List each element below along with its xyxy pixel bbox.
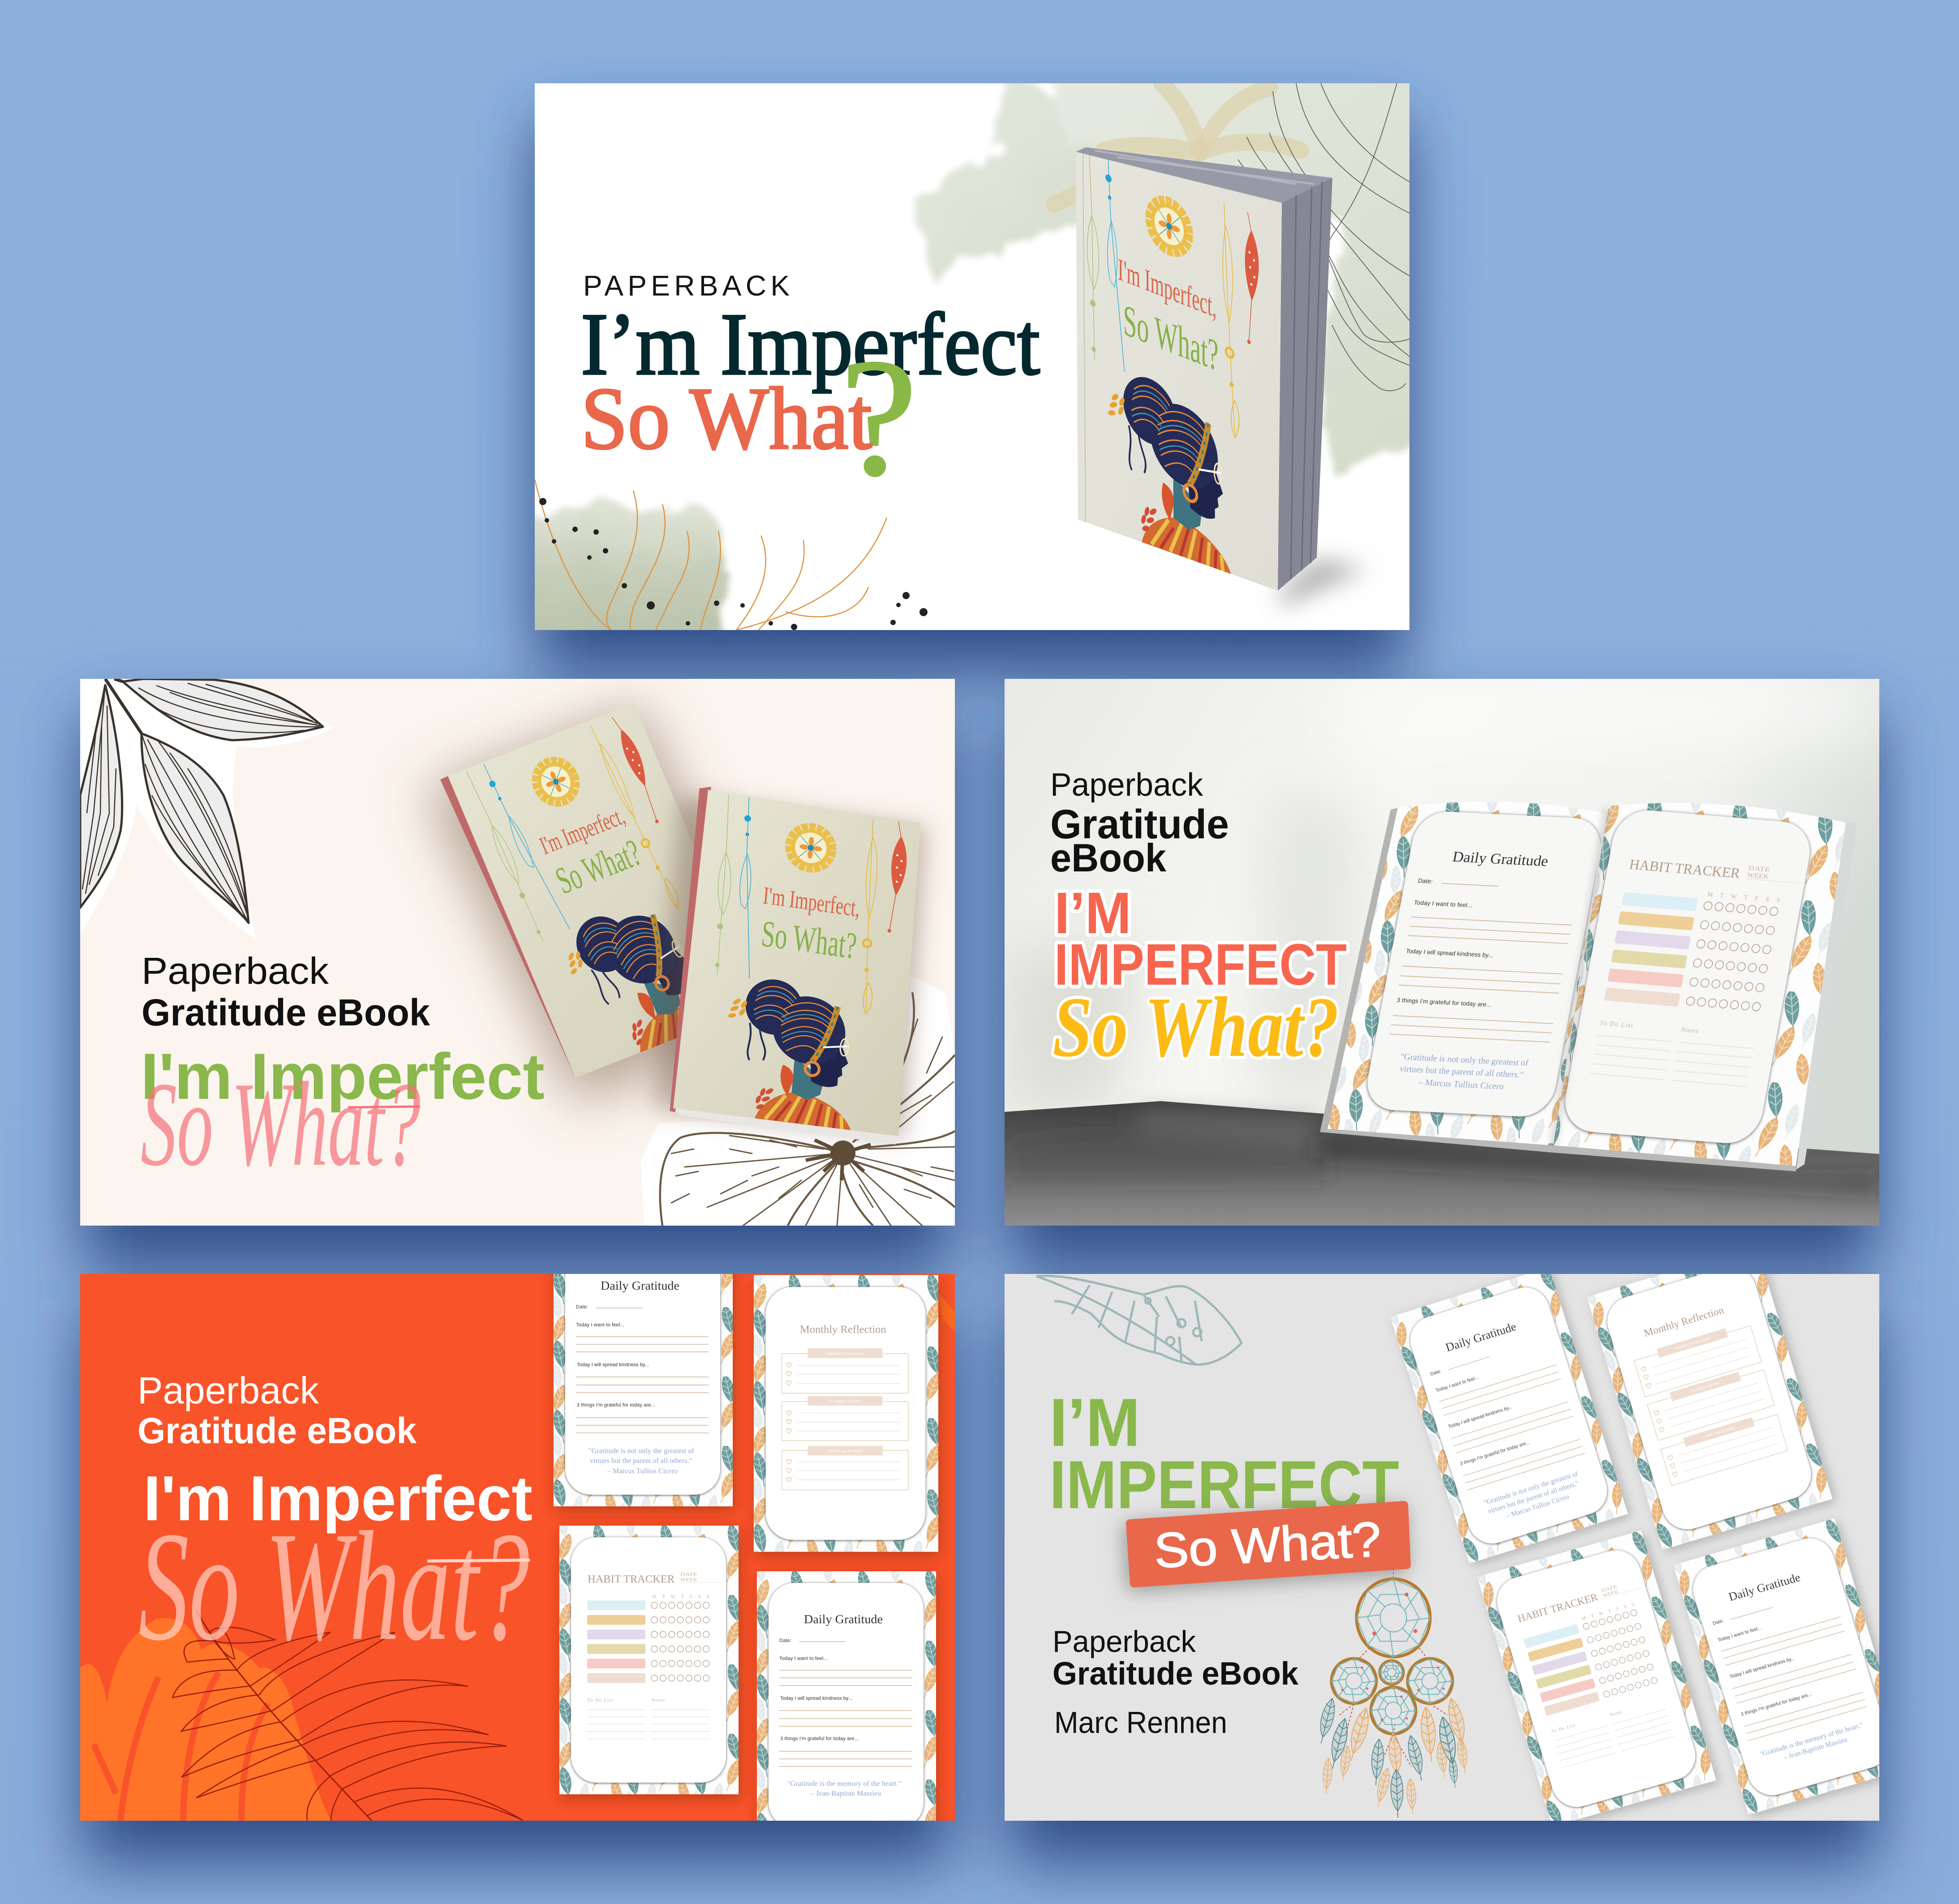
page text: HABIT TRACKER — [1516, 1591, 1599, 1625]
panel: top hero with standing book — [535, 83, 1409, 630]
title: IMPERFECT: IMPERFECT — [1054, 931, 1347, 997]
page text: – Marcus Tullius Cicero — [607, 1467, 678, 1475]
page text: M T W T F S S — [1581, 1602, 1635, 1621]
page text: habit tracker: M T W T F S S — [1706, 891, 1781, 904]
heading: gratitude ebook: Gratitude eBook — [1053, 1656, 1299, 1692]
page text: habit tracker: HABIT TRACKER — [1628, 856, 1741, 881]
book: standing paperback — [1076, 145, 1332, 591]
page: daily gratitude — [554, 1238, 733, 1506]
page text: Today I will spread kindness by... — [1729, 1656, 1796, 1680]
page text — [779, 1612, 901, 1797]
title: I'm Imperfect: I’m Imperfect — [581, 295, 1040, 393]
page text: daily gratitude: – Marcus Tullius Cicero — [1417, 1078, 1504, 1091]
cover title: So What? — [550, 831, 647, 902]
page text: Today I will spread kindness by... — [780, 1696, 852, 1701]
page text: Daily Gratitude — [601, 1279, 679, 1292]
title: I'M: I’M — [1049, 1385, 1140, 1461]
shadow: books — [425, 706, 779, 1104]
page text: 3 things I'm grateful for today are... — [780, 1736, 859, 1741]
page text: daily gratitude: Today I will spread kindness by... — [1405, 948, 1494, 959]
page text: "Gratitude is the memory of the heart." — [787, 1780, 901, 1788]
cover title: So What? — [1123, 295, 1219, 381]
page text: Today I want to feel... — [1717, 1625, 1762, 1643]
page text: Today I will spread kindness by... — [1448, 1405, 1513, 1430]
page text: DATE — [680, 1572, 697, 1577]
page text: habit tracker — [1599, 854, 1786, 1040]
page text — [576, 1279, 695, 1475]
page text: – Jean-Baptiste Massieu — [1783, 1736, 1848, 1762]
page text: Notes — [651, 1698, 665, 1703]
title: So What: So What — [581, 369, 872, 467]
book shadow — [1314, 1136, 1882, 1194]
page text: habit tracker: WEEK — [1746, 871, 1770, 880]
cover title: I'm Imperfect, — [762, 882, 861, 922]
page text: To Do List — [587, 1698, 613, 1703]
page text: I think I can do better — [1702, 1426, 1736, 1439]
page text: "Gratitude is the memory of the heart." — [1759, 1721, 1864, 1758]
left page — [1274, 759, 1695, 1169]
heading: ebook: eBook — [1050, 836, 1167, 880]
page text: 3 things I'm grateful for today are... — [1740, 1692, 1813, 1717]
page text: "Gratitude is not only the greatest of — [1483, 1470, 1579, 1507]
page text: Daily Gratitude — [1727, 1570, 1802, 1604]
cover title: I'm Imperfect, — [536, 801, 629, 860]
orange line plants — [535, 480, 887, 630]
page text: Highlight of the month — [1675, 1336, 1711, 1351]
page text: Date: — [779, 1638, 791, 1643]
title: So What script: So What? — [1053, 979, 1339, 1075]
page text: DATE — [1601, 1584, 1618, 1593]
page: habit tracker — [559, 1526, 739, 1794]
page text — [1705, 1566, 1866, 1770]
title: I'm Imperfect: I'm Imperfect — [141, 1040, 545, 1113]
cover title: So What? — [760, 913, 859, 967]
beige monstera leaf — [1054, 83, 1301, 204]
page text: Daily Gratitude — [1444, 1320, 1518, 1354]
book: angled left — [440, 703, 761, 1078]
cover title — [758, 882, 861, 967]
title: question mark: ? — [840, 325, 917, 510]
page text: Today I will spread kindness by... — [577, 1362, 649, 1368]
page text: – Marcus Tullius Cicero — [1505, 1493, 1570, 1520]
page text: HABIT TRACKER — [588, 1574, 674, 1585]
page text — [1642, 1304, 1757, 1447]
page text: Today I want to feel... — [1435, 1375, 1479, 1394]
heading: gratitude ebook: Gratitude eBook — [142, 991, 430, 1033]
illustration: dreamcatcher — [1315, 1565, 1470, 1818]
callout: So What badge — [1130, 1505, 1407, 1583]
page text: daily gratitude: "Gratitude is not only the greatest of — [1400, 1052, 1529, 1068]
page text: Today I want to feel... — [576, 1322, 624, 1328]
page text: – Jean-Baptiste Massieu — [810, 1790, 881, 1797]
book shadow — [1278, 558, 1368, 607]
page: daily gratitude two — [757, 1571, 936, 1840]
illustration: line leaves — [80, 670, 333, 939]
heading: paperback: Paperback — [142, 950, 329, 992]
page text: daily gratitude — [1380, 847, 1568, 1093]
book: upright right — [672, 790, 921, 1145]
title: I'm Imperfect: I'm Imperfect — [143, 1463, 533, 1534]
title: IMPERFECT: IMPERFECT — [1049, 1447, 1399, 1523]
heading: paperback: Paperback — [1053, 1625, 1196, 1659]
panel: grey with tilted pages and dreamcatcher — [1005, 1246, 1910, 1827]
corner accent — [938, 1292, 955, 1332]
floor shadows — [1005, 1109, 1327, 1185]
monstera shape — [80, 1618, 331, 1821]
page text — [587, 1572, 709, 1703]
heading: paperback: Paperback — [137, 1369, 319, 1411]
author name: Marc Rennen — [1054, 1706, 1227, 1740]
page text: habit tracker: DATE — [1748, 865, 1771, 874]
title: So What script: So What? — [138, 1499, 529, 1673]
page text: Date: — [1430, 1369, 1442, 1377]
illustration: feather — [1036, 1276, 1242, 1364]
page: daily gratitude two — [1673, 1518, 1910, 1815]
page text: Monthly Reflection — [800, 1323, 886, 1335]
title: I'M: I’M — [1054, 880, 1131, 946]
palm frond — [172, 1610, 524, 1821]
page text: "Gratitude is not only the greatest of — [589, 1447, 695, 1455]
wall — [1005, 679, 1879, 1226]
page text: To Do List — [1551, 1723, 1576, 1734]
heading: paperback: Paperback — [1050, 767, 1203, 803]
heading: gratitude ebook: Gratitude eBook — [137, 1411, 417, 1451]
page: daily gratitude — [1390, 1267, 1628, 1564]
page text — [1422, 1316, 1585, 1529]
page text: Notes — [1609, 1710, 1623, 1718]
monstera slits — [94, 1672, 268, 1821]
cover title: I'm Imperfect, — [1118, 252, 1216, 325]
page text: Date: — [1712, 1618, 1724, 1626]
cover title — [536, 801, 647, 903]
cover title — [1118, 252, 1219, 381]
page text: WEEK — [1602, 1589, 1620, 1599]
page text: habit tracker: To Do List — [1599, 1019, 1633, 1029]
illustration: line flower — [641, 975, 955, 1226]
script crossbar — [427, 1560, 530, 1561]
script crossbar — [348, 1106, 420, 1107]
page text: I'm happy I did this — [829, 1399, 860, 1403]
panel: two flat-lay paperbacks — [80, 670, 955, 1226]
page text: daily gratitude: Daily Gratitude — [1451, 849, 1550, 870]
open book — [1274, 750, 1909, 1203]
heading: gratitude: Gratitude — [1050, 802, 1229, 847]
page: monthly reflection — [1587, 1246, 1832, 1550]
callout: So What badge: So What? — [1153, 1512, 1383, 1578]
page text — [800, 1323, 886, 1453]
page text: WEEK — [680, 1577, 697, 1582]
page text: daily gratitude: Date: — [1418, 877, 1433, 885]
watercolor wash bottom left — [517, 500, 727, 648]
page text — [1516, 1581, 1664, 1734]
right page — [1467, 750, 1909, 1203]
page text: daily gratitude: 3 things I'm grateful for today are... — [1396, 997, 1492, 1008]
page text: Daily Gratitude — [804, 1612, 883, 1626]
label: paperback: PAPERBACK — [583, 270, 790, 302]
page text: I'm happy I did this — [1690, 1381, 1720, 1393]
watercolor wash top right — [912, 65, 1431, 473]
panel: orange with ebook pages — [80, 1238, 955, 1840]
page text: daily gratitude: virtues but the parent of all others." — [1399, 1064, 1524, 1080]
shadow: right book — [653, 795, 927, 1140]
black ink dots — [539, 498, 928, 630]
wall shadows — [1005, 679, 1879, 1118]
page text: virtues but the parent of all others." — [1487, 1480, 1580, 1515]
page text: habit tracker: Notes — [1680, 1026, 1699, 1035]
page text: 3 things I'm grateful for today are... — [1460, 1440, 1530, 1467]
page text: I think I can do better — [828, 1449, 863, 1453]
panel: open book against wall — [1005, 679, 1909, 1226]
page: habit tracker — [1477, 1531, 1716, 1827]
page text: 3 things I'm grateful for today are... — [577, 1402, 655, 1408]
floor — [1005, 1101, 1879, 1226]
page text: Highlight of the month — [827, 1352, 865, 1356]
page text: Date: — [576, 1304, 588, 1310]
page text: M T W T F S S — [652, 1594, 709, 1600]
page text: Monthly Reflection — [1642, 1304, 1725, 1339]
page text: daily gratitude: Today I want to feel... — [1413, 899, 1473, 909]
page text: Today I want to feel... — [779, 1656, 828, 1661]
page text: virtues but the parent of all others." — [590, 1457, 692, 1465]
thin palm lines — [1238, 83, 1409, 391]
title: So What script: So What? — [141, 1057, 421, 1191]
page: monthly reflection — [754, 1275, 938, 1552]
